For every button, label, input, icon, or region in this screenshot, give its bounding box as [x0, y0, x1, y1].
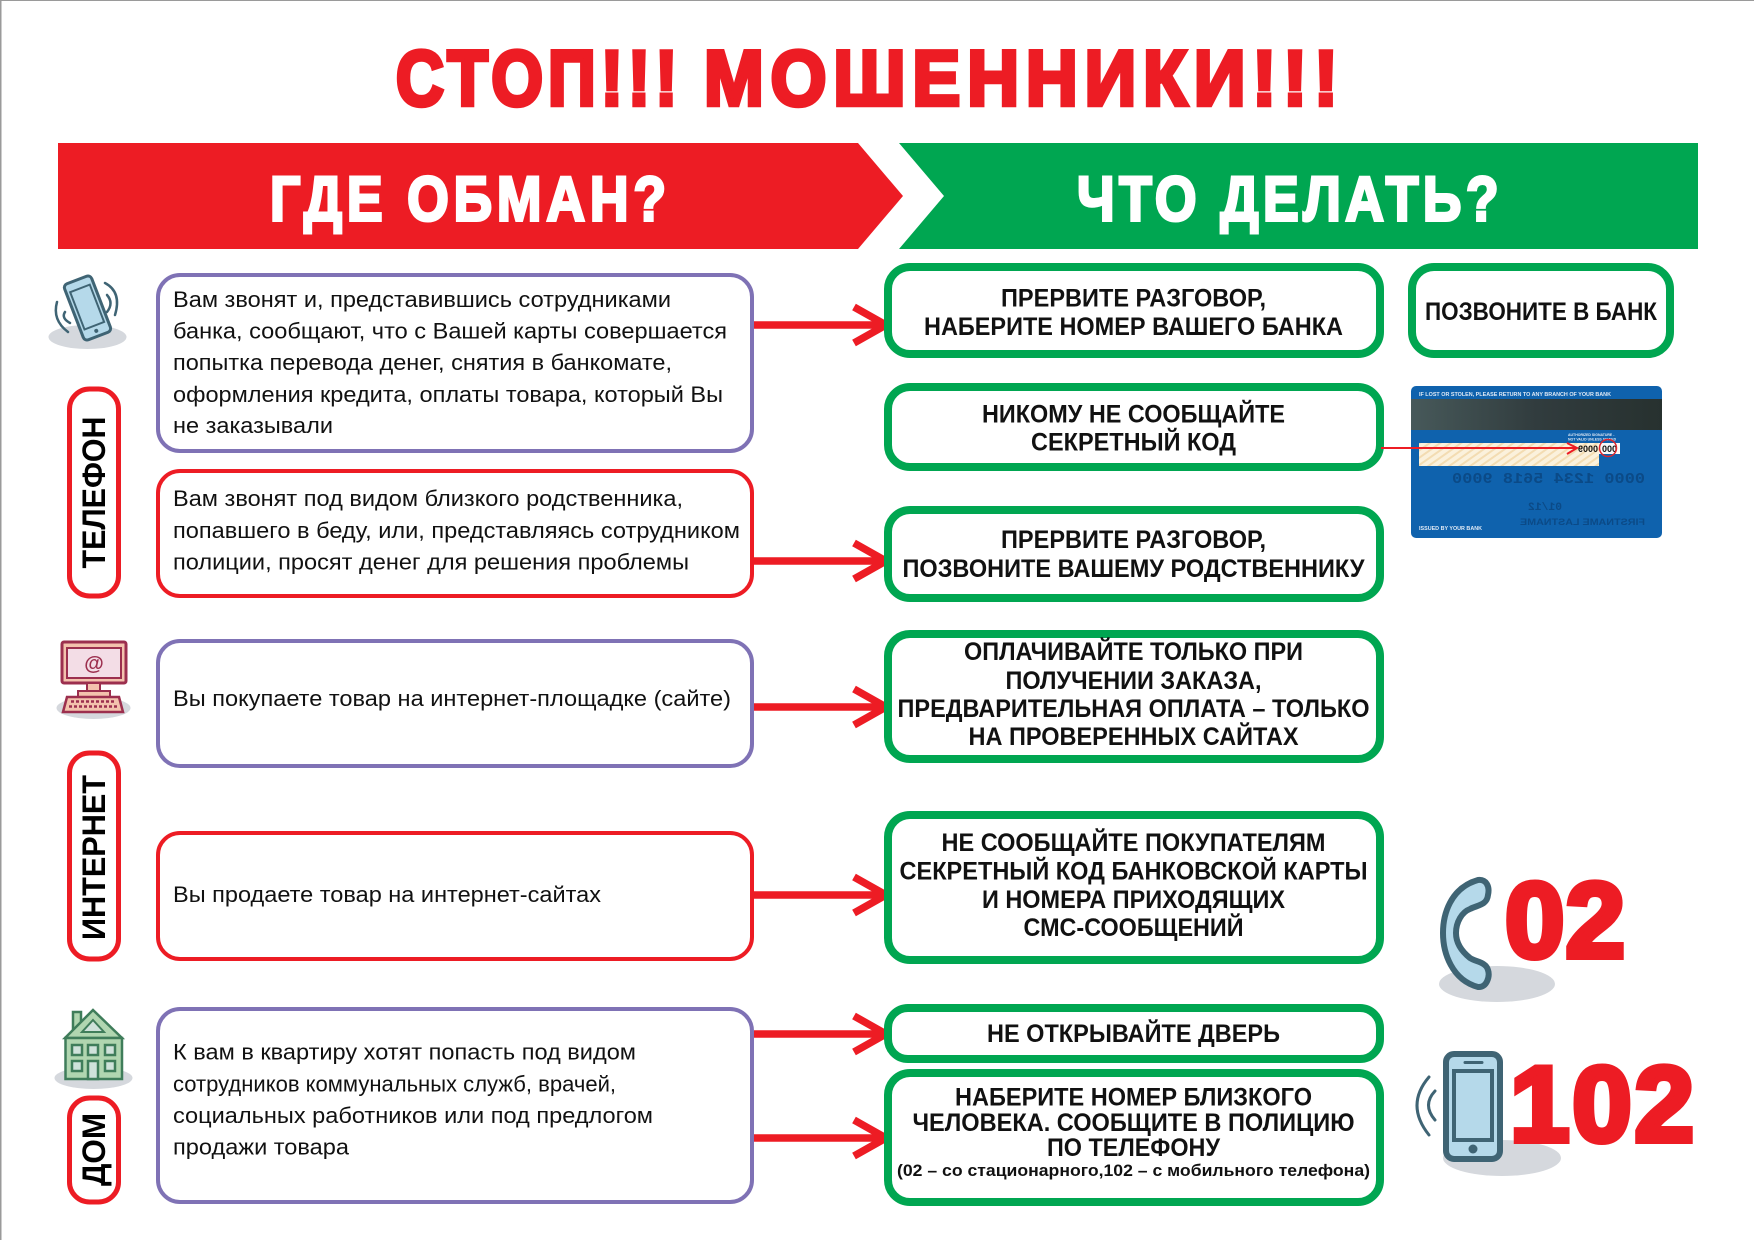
action: do not share code [888, 815, 1380, 960]
action: pay on receipt: ПРЕДВАРИТЕЛЬНАЯ ОПЛАТА – ТОЛЬКО [898, 695, 1370, 723]
action: keep code secret: НИКОМУ НЕ СООБЩАЙТЕ [982, 398, 1285, 428]
bank card back: NOT VALID UNLESS SIGNED [1568, 438, 1617, 442]
action: pay on receipt: ПОЛУЧЕНИИ ЗАКАЗА, [1006, 667, 1262, 695]
action: do not share code: И НОМЕРА ПРИХОДЯЩИХ [982, 886, 1285, 914]
action: pay on receipt: ОПЛАЧИВАЙТЕ ТОЛЬКО ПРИ [964, 636, 1303, 666]
panel: online sale [158, 833, 752, 959]
arrow: call police [754, 1120, 886, 1156]
arrow: bank call [754, 307, 886, 343]
icon: mobile phone [1417, 1054, 1561, 1176]
action: call your relative [888, 510, 1380, 598]
category: телефон: ТЕЛЕФОН [76, 416, 112, 568]
arrow: sale [754, 877, 886, 913]
icon: house [54, 1010, 132, 1089]
action: do not share code: СМС-СООБЩЕНИЙ [1024, 912, 1244, 942]
banner: где обман: ГДЕ ОБМАН? [270, 164, 666, 235]
action: end the call: НАБЕРИТЕ НОМЕР ВАШЕГО БАНКА [924, 313, 1343, 341]
icon: computer [56, 642, 130, 719]
panel: online purchase: Вы покупаете товар на интернет-площадке (сайте) [173, 686, 731, 711]
bank card back: FIRSTNAME LASTNAME [1520, 517, 1645, 527]
panel: online purchase [158, 641, 752, 766]
category: телефон [70, 389, 118, 596]
icon: landline handset [1439, 880, 1555, 1002]
panel: bank call scam: банка, сообщают, что с Вашей карты совершается [173, 318, 727, 344]
panel: home visit: К вам в квартиру хотят попасть под видом [173, 1040, 636, 1064]
bank card back: 0009 [1578, 444, 1598, 454]
action: end the call [888, 267, 1380, 354]
panel: relative scam [158, 471, 752, 596]
panel: home visit [158, 1009, 752, 1202]
number: 02: 02 [1505, 860, 1625, 980]
panel: online sale: Вы продаете товар на интернет-сайтах [173, 882, 602, 907]
action: call the bank: ПОЗВОНИТЕ В БАНК [1425, 298, 1658, 326]
title: МОШЕННИКИ!!! [704, 34, 1338, 122]
action: pay on receipt [888, 634, 1380, 759]
action: do not open door [888, 1008, 1380, 1059]
bank card back [1411, 386, 1662, 538]
action: call relative and police: (02 – со стационарного,102 – с мобильного телефона) [897, 1161, 1370, 1180]
number: 102: 102 [1510, 1044, 1694, 1164]
arrow: relative [754, 543, 886, 579]
action: call relative and police [888, 1073, 1380, 1202]
banner: где обман [58, 143, 903, 249]
action: call relative and police: НАБЕРИТЕ НОМЕР БЛИЗКОГО [955, 1084, 1312, 1112]
category: интернет [70, 753, 118, 959]
action: call your relative: ПРЕРВИТЕ РАЗГОВОР, [1001, 526, 1266, 554]
action: keep code secret [888, 387, 1380, 467]
bank card back: IF LOST OR STOLEN, PLEASE RETURN TO ANY BRANCH OF YOUR BANK [1419, 392, 1611, 398]
panel: home visit: социальных работников или под предлогом [173, 1103, 653, 1128]
bank card back: 000 [1602, 444, 1617, 454]
action: pay on receipt: НА ПРОВЕРЕННЫХ САЙТАХ [968, 721, 1299, 751]
bank card back: 01/12 [1528, 502, 1562, 514]
arrow: purchase [754, 689, 886, 725]
icon: vibrating phone [48, 275, 126, 349]
arrow: door [754, 1016, 886, 1052]
icon: computer: @ [84, 653, 104, 675]
title: СТОП!!! [396, 35, 677, 122]
panel: bank call scam: Вам звонят и, представившись сотрудниками [173, 287, 671, 312]
panel: home visit: сотрудников коммунальных служб, врачей, [173, 1072, 616, 1096]
banner: что делать [899, 143, 1698, 249]
action: keep code secret: СЕКРЕТНЫЙ КОД [1031, 426, 1236, 456]
arrow: secret code pointer [1381, 443, 1577, 454]
bank card back: 0000 1234 5618 9000 [1452, 471, 1645, 488]
banner: что делать: ЧТО ДЕЛАТЬ? [1077, 164, 1499, 235]
action: do not share code: СЕКРЕТНЫЙ КОД БАНКОВСКОЙ КАРТЫ [900, 856, 1368, 886]
panel: bank call scam [158, 275, 752, 451]
bank card back: AUTHORIZED SIGNATURE - [1568, 433, 1615, 437]
action: do not share code: НЕ СООБЩАЙТЕ ПОКУПАТЕЛЯМ [942, 827, 1326, 857]
action: call relative and police: ПО ТЕЛЕФОНУ [1047, 1134, 1220, 1162]
category: дом: ДОМ [76, 1113, 112, 1186]
panel: bank call scam: оформления кредита, оплаты товара, который Вы [173, 382, 723, 407]
bank card back: ISSUED BY YOUR BANK [1419, 526, 1482, 532]
panel: relative scam: полиции, просят денег для решения проблемы [173, 550, 689, 574]
panel: bank call scam: попытка перевода денег, снятия в банкомате, [173, 350, 672, 375]
panel: home visit: продажи товара [173, 1134, 349, 1160]
panel: relative scam: попавшего в беду, или, представляясь сотрудником [173, 518, 740, 543]
action: call your relative: ПОЗВОНИТЕ ВАШЕМУ РОДСТВЕННИКУ [902, 555, 1365, 583]
action: end the call: ПРЕРВИТЕ РАЗГОВОР, [1001, 284, 1266, 312]
title [396, 34, 1338, 122]
category: дом [70, 1098, 118, 1202]
panel: bank call scam: не заказывали [173, 413, 333, 438]
action: do not open door: НЕ ОТКРЫВАЙТЕ ДВЕРЬ [987, 1018, 1280, 1048]
panel: relative scam: Вам звонят под видом близкого родственника, [173, 486, 683, 511]
action: call relative and police: ЧЕЛОВЕКА. СООБЩИТЕ В ПОЛИЦИЮ [912, 1109, 1354, 1137]
action: call the bank [1412, 267, 1670, 354]
category: интернет: ИНТЕРНЕТ [76, 775, 112, 940]
